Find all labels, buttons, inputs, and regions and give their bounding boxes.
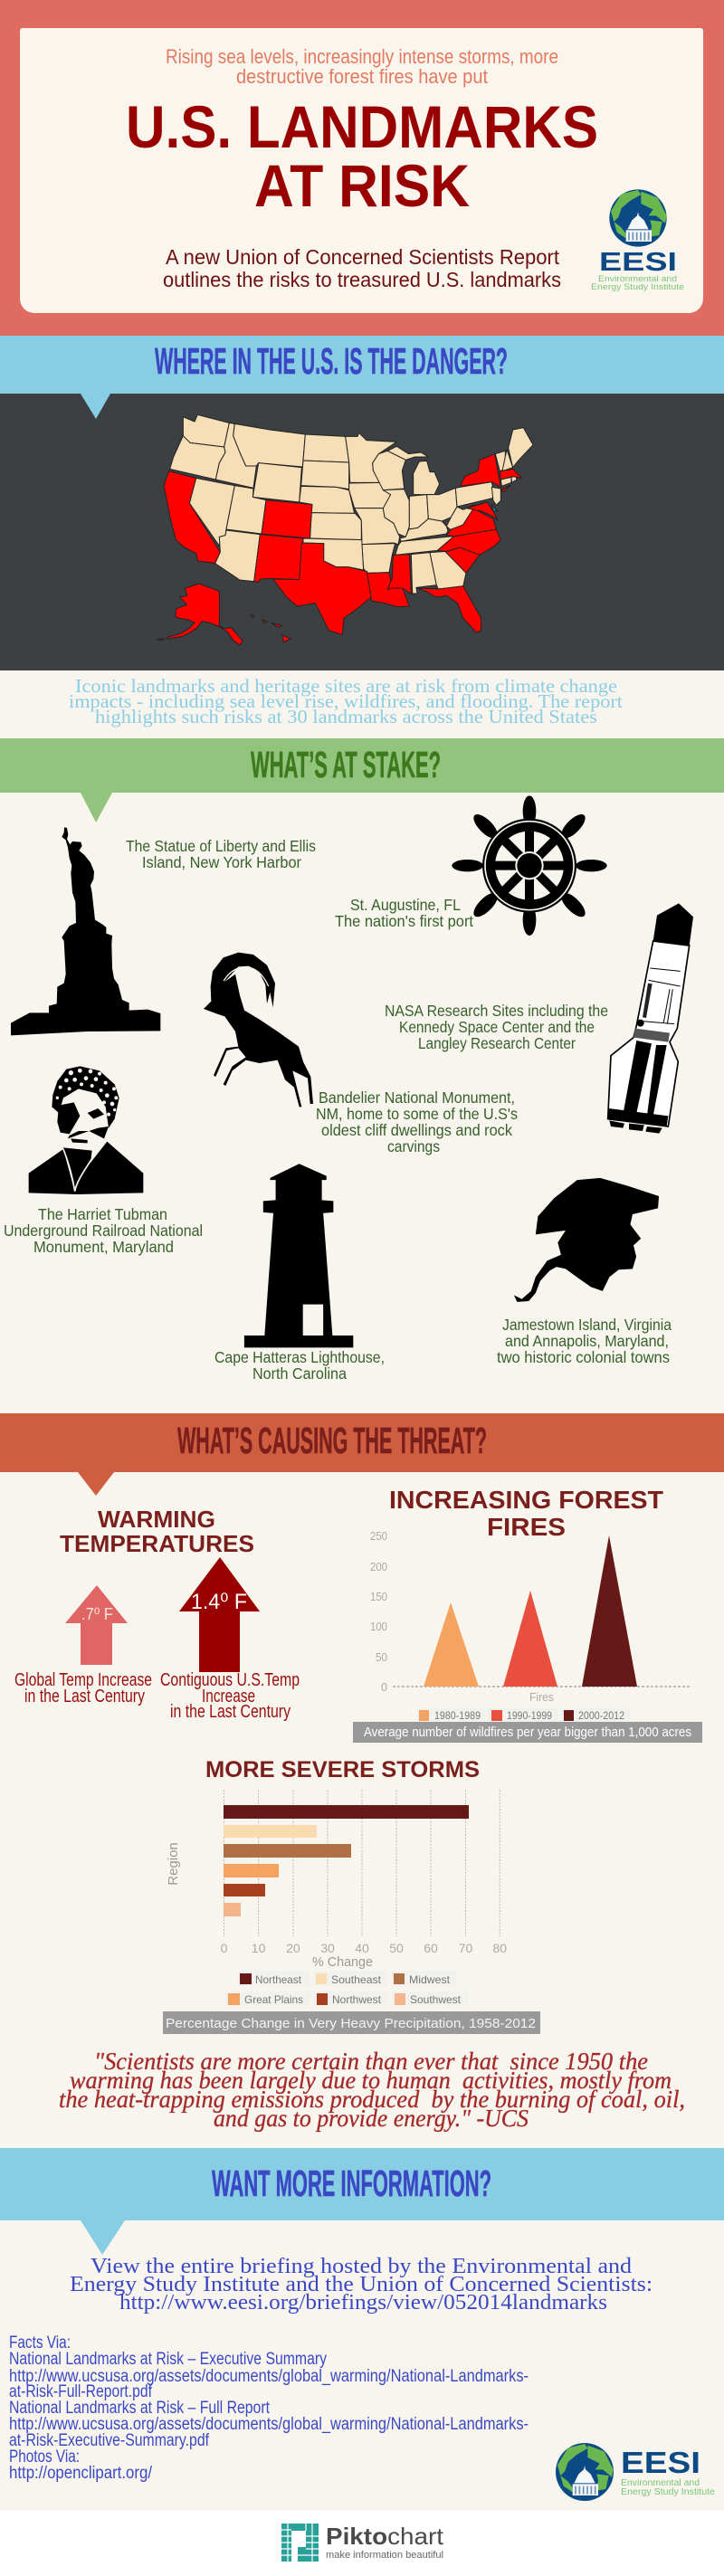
text block: iconic landmarks xyxy=(69,675,623,727)
label: Bandelier: NM, home to some of the U.S's xyxy=(316,1105,518,1123)
chart: heavy precipitation bars: 70 xyxy=(459,1941,472,1955)
legend: wildfire decades: 1980-1989 xyxy=(434,1709,481,1722)
icon: Harriet Tubman portrait xyxy=(29,1066,143,1194)
legend: wildfire decades: 1990-1999 xyxy=(507,1709,552,1722)
label: Harriet Tubman: Underground Railroad National xyxy=(4,1221,203,1240)
heading: warming temperatures: WARMING xyxy=(98,1506,215,1533)
label: contiguous temp: Increase xyxy=(202,1687,255,1706)
label: contiguous temp: in the Last Century xyxy=(170,1702,291,1722)
chart: wildfires: 100 xyxy=(370,1620,387,1633)
logo: EESI footer: Environmental and xyxy=(621,2478,700,2488)
panel: more severe storms xyxy=(163,1757,540,2034)
legend: regions: Northwest xyxy=(332,1993,382,2006)
text block: sources: at-Risk-Full-Report.pdf xyxy=(9,2382,153,2401)
text block: sources: Photos Via: xyxy=(9,2448,80,2467)
heading: increasing forest fires: INCREASING FOREST xyxy=(389,1486,663,1514)
chart: heavy precipitation bars: % Change xyxy=(312,1954,373,1970)
report description: outlines the risks to treasured U.S. landmarks xyxy=(163,268,561,291)
logo: EESI footer: Energy Study Institute xyxy=(621,2487,715,2497)
label: Jamestown: Jamestown Island, Virginia xyxy=(502,1316,672,1334)
logo: EESI header: Energy Study Institute xyxy=(591,282,684,292)
icon: ibex carving xyxy=(204,953,313,1107)
panel: where is the danger xyxy=(0,336,724,670)
caption: precipitation: Percentage Change in Very Heavy Precipitation, 1958-2012 xyxy=(166,2016,536,2031)
text block: sources xyxy=(9,2334,529,2483)
logo: EESI footer xyxy=(556,2443,715,2501)
label: Bandelier xyxy=(316,1088,518,1155)
chart: wildfires: 0 xyxy=(381,1680,387,1694)
legend: regions: Northeast xyxy=(255,1973,302,1986)
heading: what's at stake: WHAT’S AT STAKE? xyxy=(251,744,441,785)
logo: Piktochart: make information beautiful xyxy=(326,2550,443,2561)
label: St. Augustine: The nation's first port xyxy=(335,912,473,930)
label: Harriet Tubman: Monument, Maryland xyxy=(33,1238,174,1256)
panel: increasing forest fires xyxy=(353,1486,702,1743)
logo: EESI footer: EESI xyxy=(621,2446,700,2479)
heading: want more information: WANT MORE INFORMATION? xyxy=(212,2163,491,2204)
arrow: global temperature xyxy=(65,1585,128,1665)
chart: heavy precipitation bars: 10 xyxy=(252,1941,266,1955)
label: Bandelier: oldest cliff dwellings and rock xyxy=(321,1121,512,1139)
text block: iconic landmarks: Iconic landmarks and heritage sites are at risk from climate change xyxy=(75,675,617,697)
icon: colonial man silhouette xyxy=(514,1178,659,1302)
quote: UCS: the heat-trapping emissions produced by the burning of coal, oil, xyxy=(59,2086,685,2113)
chart: heavy precipitation bars: 30 xyxy=(320,1941,335,1955)
label: Harriet Tubman xyxy=(4,1205,203,1256)
caption: precipitation xyxy=(163,2011,540,2034)
logo: EESI header: Environmental and xyxy=(598,274,677,284)
text block: sources: http://www.ucsusa.org/assets/documents/global_warming/National-Landmarks- xyxy=(9,2367,529,2386)
heading: warming temperatures: TEMPERATURES xyxy=(60,1530,254,1557)
panel: warming temperatures xyxy=(14,1506,300,1722)
intro text xyxy=(166,45,558,88)
text block: iconic landmarks: impacts - including sea level rise, wildfires, and flooding. The report xyxy=(69,690,623,712)
label: contiguous temp: Contiguous U.S.Temp xyxy=(160,1670,300,1690)
chart: heavy precipitation bars: 40 xyxy=(355,1941,369,1955)
legend: wildfire decades xyxy=(417,1708,630,1722)
chart: heavy precipitation bars: 50 xyxy=(389,1941,404,1955)
icon: lighthouse xyxy=(244,1164,353,1347)
label: global temp: Global Temp Increase xyxy=(14,1670,152,1690)
label: Cape Hatteras: Cape Hatteras Lighthouse, xyxy=(214,1348,385,1366)
label: Jamestown: two historic colonial towns xyxy=(497,1348,670,1366)
panel: what's causing the threat band xyxy=(0,1413,724,1496)
label: statue of liberty xyxy=(126,837,316,871)
panel: want more information band xyxy=(0,2148,724,2255)
quote: UCS: and gas to provide energy." -UCS xyxy=(214,2105,529,2132)
label: NASA: Kennedy Space Center and the xyxy=(399,1018,595,1036)
heading: more severe storms: MORE SEVERE STORMS xyxy=(205,1757,480,1782)
legend: regions: Midwest xyxy=(409,1973,451,1986)
label: statue of liberty: Island, New York Harbor xyxy=(142,853,301,871)
legend: regions: Southeast xyxy=(331,1973,382,1986)
chart: wildfires xyxy=(370,1529,691,1704)
chart: heavy precipitation bars: Region xyxy=(166,1842,181,1886)
title: U.S. LANDMARKS xyxy=(126,93,598,160)
label: NASA: NASA Research Sites including the xyxy=(385,1002,608,1020)
logo: Piktochart xyxy=(281,2523,444,2562)
icon: statue of liberty xyxy=(11,827,160,1035)
label: Bandelier: carvings xyxy=(387,1137,440,1155)
title xyxy=(126,93,598,219)
chart: wildfires: Fires xyxy=(529,1690,554,1704)
report description xyxy=(163,245,561,291)
chart: wildfires: 250 xyxy=(370,1529,387,1543)
label: contiguous temp xyxy=(160,1670,300,1722)
intro text: Rising sea levels, increasingly intense storms, more xyxy=(166,45,558,68)
label: NASA xyxy=(385,1002,608,1052)
caption: wildfires xyxy=(353,1722,702,1743)
text block: briefing link: View the entire briefing hosted by the Environmental and xyxy=(90,2255,632,2278)
chart: wildfires: 200 xyxy=(370,1560,387,1573)
legend: wildfire decades: 2000-2012 xyxy=(578,1709,624,1722)
legend: regions: Southwest xyxy=(410,1993,462,2006)
text block: sources: at-Risk-Executive-Summary.pdf xyxy=(9,2431,210,2450)
label: NASA: Langley Research Center xyxy=(418,1034,576,1052)
logo: EESI header: EESI xyxy=(599,248,677,277)
icon: ship wheel xyxy=(452,795,607,936)
text block: briefing link: http://www.eesi.org/briefings/view/052014landmarks xyxy=(119,2291,607,2315)
quote: UCS: "Scientists are more certain than ever that since 1950 the xyxy=(94,2048,648,2075)
report description: A new Union of Concerned Scientists Report xyxy=(166,245,560,269)
intro text: destructive forest fires have put xyxy=(236,65,488,88)
label: Cape Hatteras: North Carolina xyxy=(252,1364,347,1383)
label: Jamestown: and Annapolis, Maryland, xyxy=(505,1332,669,1350)
chart: heavy precipitation bars xyxy=(166,1790,507,1970)
text block: sources: http://www.ucsusa.org/assets/documents/global_warming/National-Landmarks- xyxy=(9,2415,529,2434)
chart: heavy precipitation bars: 20 xyxy=(286,1941,300,1955)
label: St. Augustine: St. Augustine, FL xyxy=(350,896,461,914)
chart: heavy precipitation bars: 60 xyxy=(424,1941,438,1955)
legend: regions xyxy=(225,1971,468,2006)
chart: wildfires: 50 xyxy=(376,1650,387,1664)
legend: regions: Great Plains xyxy=(244,1993,303,2006)
panel: what's at stake band xyxy=(0,738,724,822)
title: AT RISK xyxy=(254,152,470,219)
map: at-risk states xyxy=(157,414,533,645)
text block: sources: National Landmarks at Risk – Executive Summary xyxy=(9,2350,327,2369)
label: St. Augustine xyxy=(335,896,473,930)
logo: EESI header xyxy=(591,189,684,292)
arrow: contiguous U.S. temperature xyxy=(179,1557,260,1672)
label: Harriet Tubman: The Harriet Tubman xyxy=(38,1205,167,1223)
arrow: global temperature: .7⁰ F xyxy=(81,1605,113,1623)
chart: wildfires: 150 xyxy=(370,1590,387,1603)
icon: rocket xyxy=(608,903,693,1134)
label: Jamestown xyxy=(497,1316,672,1366)
heading: warming temperatures xyxy=(60,1506,254,1557)
arrow: contiguous U.S. temperature: 1.4⁰ F xyxy=(191,1590,247,1614)
chart: heavy precipitation bars: 80 xyxy=(493,1941,507,1955)
text block: briefing link xyxy=(70,2255,653,2315)
logo: Piktochart: Piktochart xyxy=(326,2523,444,2550)
label: statue of liberty: The Statue of Liberty and Ellis xyxy=(126,837,316,855)
heading: increasing forest fires: FIRES xyxy=(487,1513,566,1541)
text block: briefing link: Energy Study Institute and the Union of Concerned Scientists: xyxy=(70,2273,653,2296)
chart: heavy precipitation bars: 0 xyxy=(221,1941,228,1955)
heading: increasing forest fires xyxy=(389,1486,663,1541)
label: global temp: in the Last Century xyxy=(24,1687,145,1706)
text block: sources: National Landmarks at Risk – Full Report xyxy=(9,2399,271,2418)
label: Cape Hatteras xyxy=(214,1348,385,1383)
label: Bandelier: Bandelier National Monument, xyxy=(319,1088,515,1107)
text block: iconic landmarks: highlights such risks at 30 landmarks across the United States xyxy=(95,706,597,727)
quote: UCS: warming has been largely due to human activities, mostly from xyxy=(70,2067,672,2094)
label: global temp xyxy=(14,1670,152,1706)
text block: sources: http://openclipart.org/ xyxy=(9,2464,153,2483)
panel: header xyxy=(0,0,724,336)
text block: sources: Facts Via: xyxy=(9,2334,71,2353)
caption: wildfires: Average number of wildfires per year bigger than 1,000 acres xyxy=(364,1725,691,1740)
quote: UCS xyxy=(59,2048,685,2132)
